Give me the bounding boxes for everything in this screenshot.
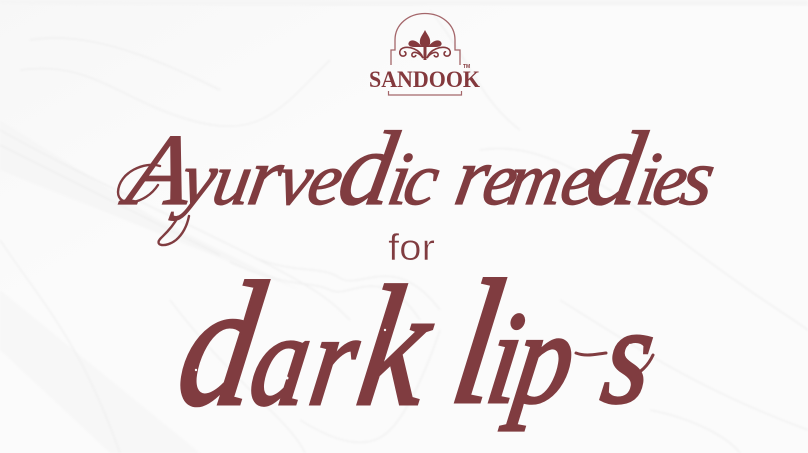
word: lips: s bbox=[594, 278, 665, 433]
logo fleur-de-lis and scrolls bbox=[400, 30, 450, 60]
logo trademark: TM bbox=[463, 64, 470, 70]
logo: Sandook bbox=[369, 14, 480, 95]
word: remedies: i bbox=[631, 137, 667, 221]
word: remedies: e bbox=[555, 140, 602, 221]
logo arch bbox=[391, 14, 460, 65]
title: Ayurvedic remedies bbox=[114, 111, 726, 245]
word: remedies: m bbox=[502, 140, 570, 221]
word: Ayurvedic: v bbox=[272, 140, 320, 221]
word: remedies: e bbox=[477, 140, 524, 221]
word: dark: r bbox=[301, 286, 369, 433]
logo wordmark: SANDOOK bbox=[369, 67, 480, 92]
word: Ayurvedic: A bbox=[114, 114, 204, 227]
word: lips: l bbox=[441, 244, 515, 441]
word: Ayurvedic: r bbox=[242, 131, 291, 222]
word: dark: d bbox=[167, 246, 275, 443]
word: remedies: r bbox=[449, 131, 498, 222]
word: remedies: d bbox=[579, 111, 653, 228]
flourishes on Ayurvedic and remedies bbox=[118, 165, 189, 245]
speckled texture on lettering bbox=[195, 304, 631, 392]
word: Ayurvedic: i bbox=[382, 137, 418, 221]
word: Ayurvedic: u bbox=[207, 140, 259, 221]
subtitle: for: for bbox=[388, 227, 435, 268]
logo bottom bracket bbox=[388, 91, 462, 95]
word: lips: i bbox=[478, 284, 533, 431]
word: dark: k bbox=[348, 251, 445, 441]
word: Ayurvedic: d bbox=[331, 111, 405, 228]
word: lips: p bbox=[498, 284, 585, 431]
title: dark lips bbox=[167, 244, 670, 443]
word: Ayurvedic: e bbox=[302, 140, 349, 221]
word: remedies: s bbox=[675, 134, 722, 222]
word: remedies: e bbox=[647, 140, 694, 221]
word: dark: a bbox=[242, 286, 321, 433]
word: Ayurvedic: c bbox=[398, 140, 445, 221]
word: Ayurvedic: y bbox=[168, 137, 225, 221]
flourishes on lips bbox=[576, 353, 653, 376]
